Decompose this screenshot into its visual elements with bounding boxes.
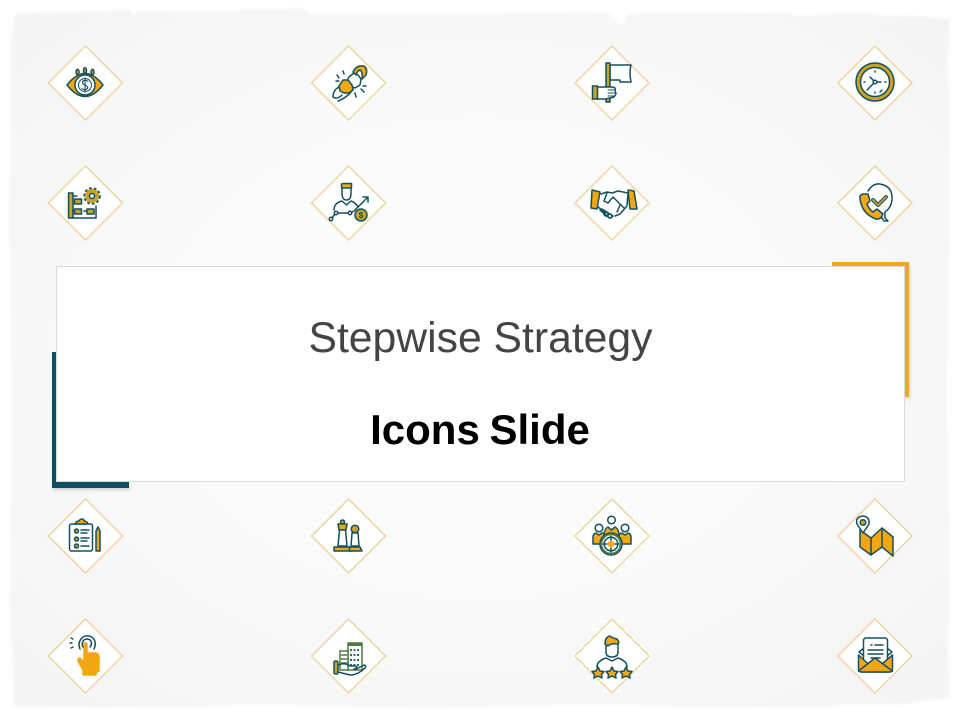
- icon: person with growth path: $: [359, 211, 364, 220]
- icon: open envelope with letter: [838, 619, 912, 693]
- title panel: [56, 266, 904, 482]
- bracket shadow: orange top-right: [832, 262, 909, 397]
- icon: clipboard checklist: [48, 499, 122, 573]
- icon: clock: [838, 46, 912, 120]
- title: Stepwise Strategy: Stepwise Strategy: [308, 314, 653, 362]
- icon: person with growth path: [312, 166, 386, 240]
- icon: hands joining puzzle gears: [312, 46, 386, 120]
- icon: process chart with gear: [48, 166, 122, 240]
- icon: person with star rating: [575, 619, 649, 693]
- icon: eye with dollar: [48, 46, 122, 120]
- icon: handshake: [575, 166, 649, 240]
- subtitle: Icons Slide: Icons Slide: [370, 406, 590, 453]
- icon: team with target: [575, 499, 649, 573]
- orange bracket: [832, 262, 909, 397]
- icon: phone with check: [838, 166, 912, 240]
- icon: building on hand: [312, 619, 386, 693]
- icon: map with pin: [838, 499, 912, 573]
- teal bracket: [52, 352, 129, 488]
- icon: tapping hand: [48, 619, 122, 693]
- icon: hand holding flag: [575, 46, 649, 120]
- icon: chess pieces: [312, 499, 386, 573]
- bracket shadow: teal bottom-left: [52, 352, 129, 488]
